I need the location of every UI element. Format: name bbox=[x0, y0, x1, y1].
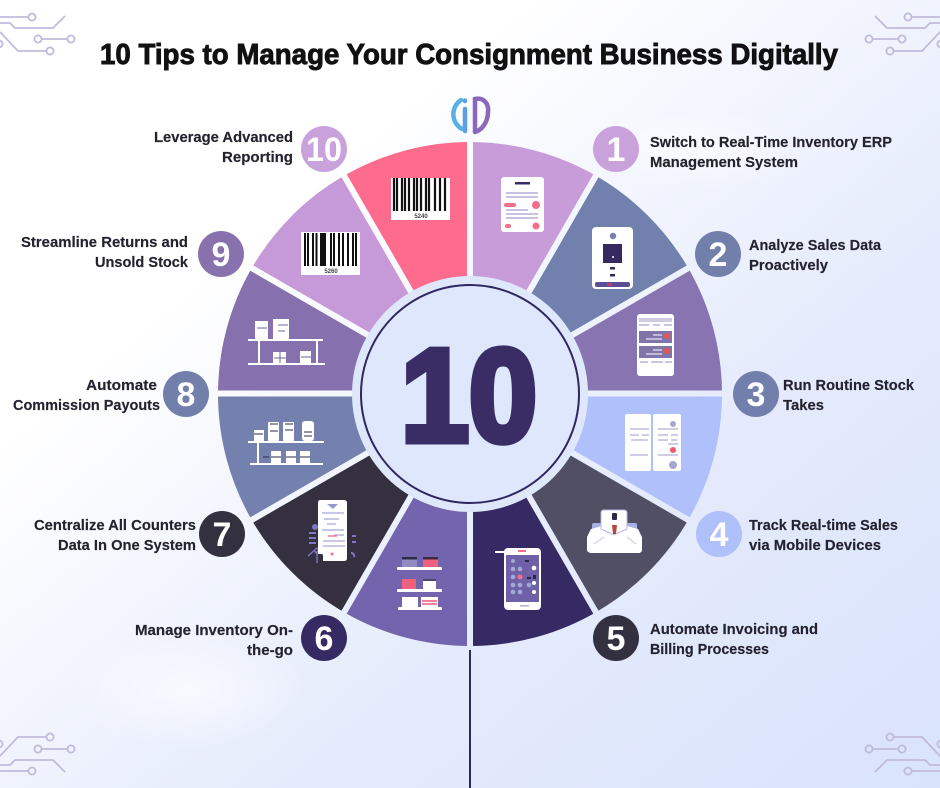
tip 6: 6 bbox=[315, 620, 333, 658]
segment 2 bbox=[532, 177, 687, 332]
tip 3: Run Routine Stock bbox=[783, 378, 915, 394]
segment 8 bbox=[253, 456, 408, 611]
connector line bbox=[469, 650, 471, 788]
tip 7: 7 bbox=[213, 516, 231, 554]
tip 2: Analyze Sales Data bbox=[749, 238, 882, 254]
tip 10: Leverage Advanced bbox=[154, 130, 293, 146]
segment 4 bbox=[574, 396, 722, 518]
tip 9: 9 bbox=[212, 236, 230, 274]
tip 4 bbox=[696, 511, 898, 557]
tip 7 bbox=[34, 511, 245, 557]
icon: report document bbox=[501, 177, 544, 232]
icon: package bbox=[587, 510, 642, 553]
tip 1: Management System bbox=[650, 155, 798, 171]
segment 11 bbox=[253, 177, 408, 332]
segment 12 bbox=[346, 142, 467, 290]
icon: barcode label left bbox=[301, 232, 360, 275]
tip 3: Takes bbox=[783, 398, 824, 414]
icon: open ledger bbox=[625, 414, 681, 471]
tip 10: 10 bbox=[306, 131, 342, 169]
center disc bbox=[352, 276, 588, 512]
tip 9: Streamline Returns and bbox=[21, 235, 188, 251]
tip 4: 4 bbox=[710, 516, 729, 554]
segment 1 bbox=[473, 142, 594, 290]
segment 7 bbox=[346, 498, 467, 646]
circuit decoration: bottom right bbox=[865, 733, 940, 775]
icon: barcode label left: 5260 bbox=[324, 269, 338, 275]
icon: storage shelf bbox=[248, 421, 324, 464]
tip 3: 3 bbox=[747, 376, 765, 414]
icon: barcode label right bbox=[391, 178, 450, 220]
icon: phone with dark panel bbox=[592, 227, 633, 289]
tip 10 bbox=[154, 126, 347, 172]
tip 8: Commission Payouts bbox=[13, 398, 160, 414]
tip 6: Manage Inventory On- bbox=[135, 623, 293, 639]
tip 5: Automate Invoicing and bbox=[650, 622, 818, 638]
tip 9 bbox=[21, 231, 244, 277]
tip 4: via Mobile Devices bbox=[749, 538, 881, 554]
tip 6: the-go bbox=[247, 643, 293, 659]
wheel of twelve segments bbox=[218, 142, 722, 646]
tip 8: Automate bbox=[86, 378, 157, 394]
center number 10: 10 bbox=[401, 322, 537, 469]
tip 8: 8 bbox=[177, 376, 195, 414]
tip 4: Track Real-time Sales bbox=[749, 518, 898, 534]
icon: product shelves bbox=[397, 557, 442, 610]
segment 9 bbox=[218, 396, 366, 518]
tip 5: Billing Processes bbox=[650, 642, 769, 658]
tip 3 bbox=[733, 371, 915, 417]
icon: company logo bbox=[453, 99, 488, 132]
icon: barcode label right: 5240 bbox=[414, 214, 428, 220]
title: 10 Tips to Manage Your Consignment Business Digitally bbox=[100, 39, 838, 71]
circuit decoration: top left bbox=[0, 13, 75, 55]
tip 6 bbox=[135, 615, 347, 661]
circuit decoration: bottom left bbox=[0, 733, 75, 775]
tip 1: 1 bbox=[607, 131, 625, 169]
tip 9: Unsold Stock bbox=[95, 255, 189, 271]
circuit decoration: top right bbox=[865, 13, 940, 55]
icon: storage shelf with boxes bbox=[248, 319, 325, 364]
tip 8 bbox=[13, 371, 209, 417]
icon: phone with upload arrow bbox=[308, 500, 356, 563]
tip 5: 5 bbox=[607, 620, 625, 658]
tip 10: Reporting bbox=[222, 150, 293, 166]
segment 5 bbox=[532, 456, 687, 611]
tip 7: Data In One System bbox=[58, 538, 196, 554]
tip 2: 2 bbox=[709, 236, 727, 274]
icon: tablet with keypad bbox=[495, 548, 541, 610]
tip 1 bbox=[593, 126, 892, 172]
segment 3 bbox=[574, 270, 722, 390]
icon: stock report screen bbox=[637, 314, 674, 376]
segment 6 bbox=[473, 498, 594, 646]
segment 10 bbox=[218, 270, 366, 390]
tip 1: Switch to Real-Time Inventory ERP bbox=[650, 135, 892, 151]
tip 5 bbox=[593, 615, 818, 661]
tip 2: Proactively bbox=[749, 258, 828, 274]
tip 2 bbox=[695, 231, 882, 277]
tip 7: Centralize All Counters bbox=[34, 518, 196, 534]
